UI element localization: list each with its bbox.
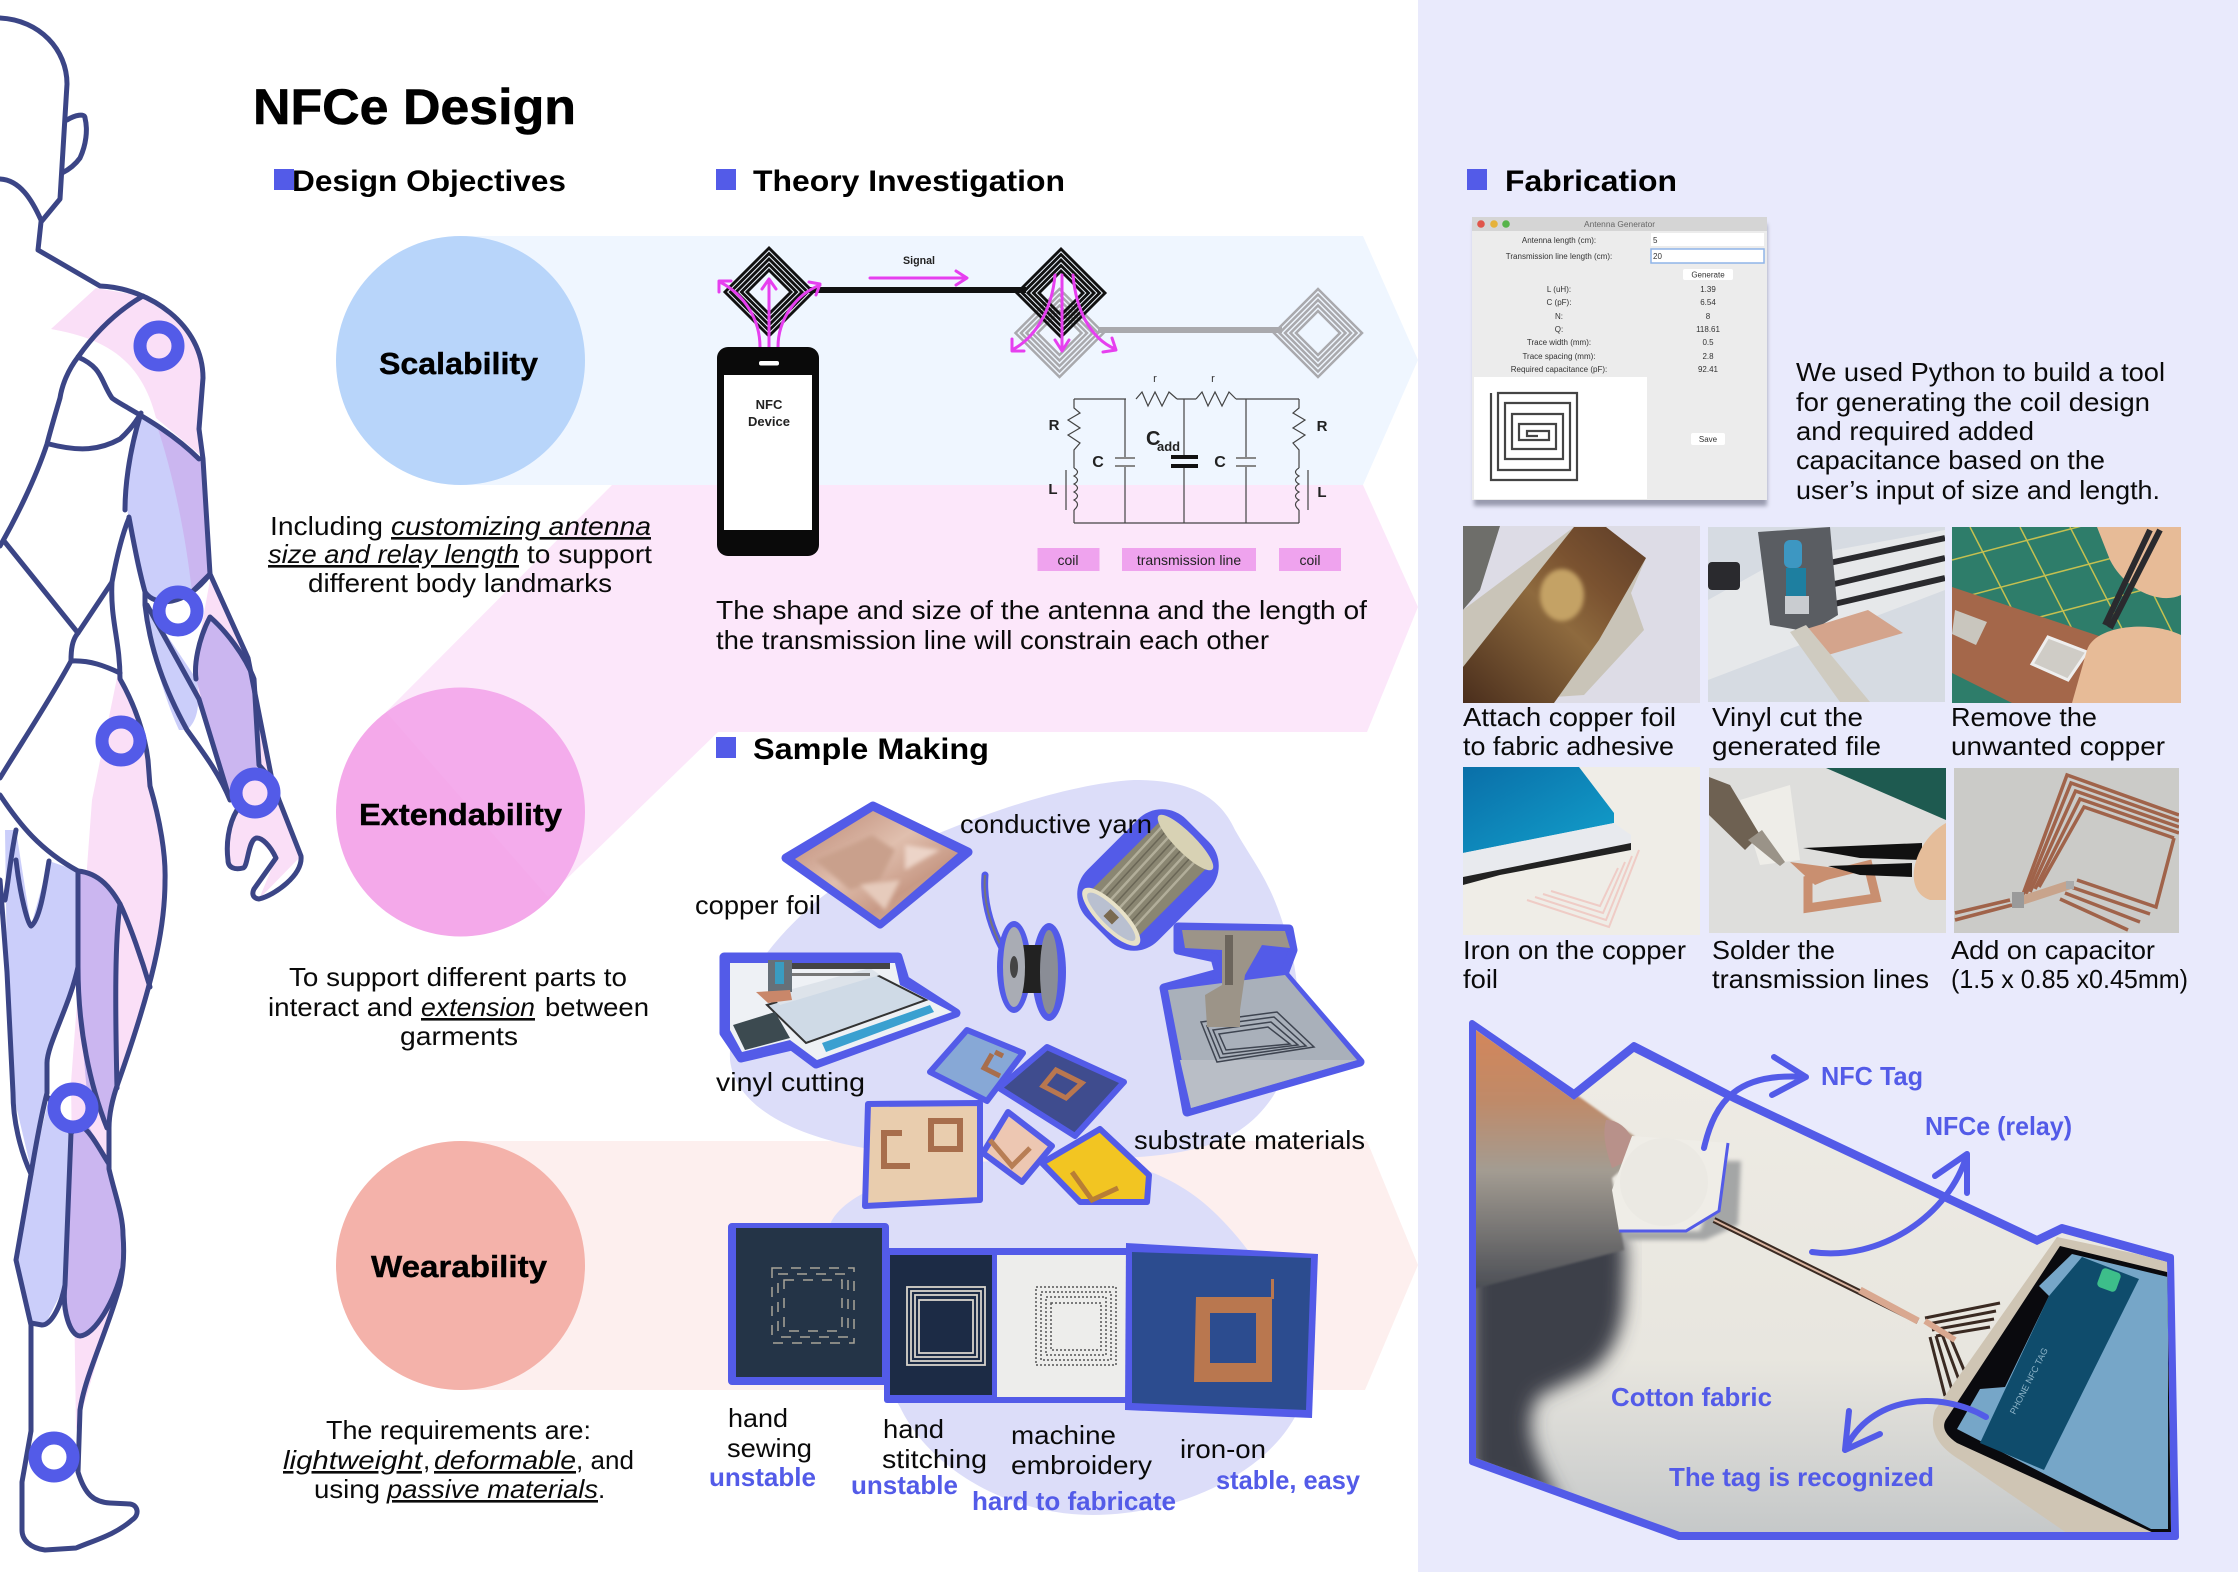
captions: first row steps: Remove the xyxy=(1951,702,2097,732)
labels: sewing methods: unstable xyxy=(709,1462,816,1492)
objective: scalability circle: Scalability xyxy=(379,346,539,381)
text: extendability description: between xyxy=(545,992,649,1022)
captions: first row steps: to fabric adhesive xyxy=(1463,731,1674,761)
captions: first row steps: Vinyl cut the xyxy=(1712,702,1863,732)
diagram: equivalent circuit: R xyxy=(1317,418,1328,435)
screenshot: antenna generator window: 5 xyxy=(1653,236,1658,245)
text: extendability description: To support different parts to xyxy=(289,962,627,992)
objective: scalability circle xyxy=(336,236,585,485)
labels: sewing methods xyxy=(709,1403,1361,1516)
photo: remove unwanted copper xyxy=(1952,527,2181,703)
labels: sewing methods: iron-on xyxy=(1180,1434,1266,1464)
text: wearability description: , and xyxy=(576,1445,634,1475)
diagram: equivalent circuit: add xyxy=(1157,439,1180,454)
text: scalability description: Including xyxy=(270,511,383,541)
heading: design objectives: Design Objectives xyxy=(292,165,566,198)
captions: first row steps: generated file xyxy=(1712,731,1881,761)
photos: substrate fabric patches xyxy=(865,1030,1149,1206)
text: extendability description xyxy=(268,962,649,1051)
screenshot: antenna generator window: Antenna Generator xyxy=(1584,220,1655,229)
title: NFCe Design xyxy=(253,79,576,135)
labels: sewing methods: hand xyxy=(728,1403,788,1433)
text: extendability description: extension xyxy=(421,992,535,1022)
captions: second row steps: (1.5 x 0.85 x0.45mm) xyxy=(1951,964,2188,994)
diagram: coils and signal xyxy=(719,248,1362,377)
labels: sewing methods: hard to fabricate xyxy=(972,1486,1176,1516)
text: tool description: capacitance based on the xyxy=(1796,445,2105,475)
diagram: equivalent circuit: C xyxy=(1146,428,1160,450)
labels: sewing methods: sewing xyxy=(727,1433,812,1463)
text: extendability description: garments xyxy=(400,1021,518,1051)
photo: hand stitching and machine embroidery swatches xyxy=(884,1248,1134,1403)
text: tool description: and required added xyxy=(1796,416,2034,446)
photo: conductive yarn spool xyxy=(1063,795,1233,965)
label: vinyl cutting: vinyl cutting xyxy=(716,1067,865,1097)
labels: sewing methods: unstable xyxy=(851,1470,958,1500)
text: wearability description: lightweight xyxy=(283,1445,424,1475)
diagram: equivalent circuit: r xyxy=(1211,373,1215,385)
diagram: equivalent circuit: C xyxy=(1214,454,1226,471)
shape: sample making blob upper xyxy=(730,780,1298,1159)
text: scalability description: different body landmarks xyxy=(308,568,612,598)
screenshot: antenna generator window: 92.41 xyxy=(1698,365,1719,374)
label: conductive yarn: conductive yarn xyxy=(960,809,1152,839)
objective: wearability circle xyxy=(336,1141,585,1390)
heading: sample making: Sample Making xyxy=(753,733,989,766)
labels: sewing methods: stable, easy xyxy=(1216,1465,1361,1495)
screenshot: antenna generator window: Required capacitance (pF): xyxy=(1511,365,1607,374)
text: theory description xyxy=(716,595,1368,655)
circle: extendability base xyxy=(336,688,585,936)
screenshot: antenna generator window: L (uH): xyxy=(1547,285,1571,294)
objective: wearability circle: Wearability xyxy=(371,1249,548,1284)
text: wearability description xyxy=(283,1415,634,1504)
screenshot: antenna generator window: Trace spacing (mm): xyxy=(1522,352,1596,361)
icon: NFC phone: NFC xyxy=(756,397,783,412)
text: wearability description: passive materials xyxy=(386,1474,598,1504)
arrow: tag recognized xyxy=(1845,1401,1986,1450)
photo: iron-on swatch xyxy=(1125,1243,1318,1418)
legend tags: coil, transmission line, coil: coil xyxy=(1299,552,1321,568)
photo: copper foil xyxy=(786,806,968,924)
screenshot: antenna generator window: 118.61 xyxy=(1696,325,1720,334)
text: scalability description xyxy=(268,511,653,598)
photo: final NFCe demo on cotton: PHONE NFC TAG xyxy=(2008,1346,2050,1416)
screenshot: antenna generator window: 0.5 xyxy=(1702,338,1714,347)
band: scalability chevron xyxy=(460,236,1418,485)
photo: solder transmission lines xyxy=(1709,768,1946,933)
text: scalability description: customizing antenna xyxy=(391,511,651,541)
text: tool description: for generating the coil design xyxy=(1796,387,2150,417)
text: tool description xyxy=(1796,357,2165,505)
text: wearability description: The requirements are: xyxy=(326,1415,591,1445)
photo: attach copper foil xyxy=(1463,526,1700,703)
captions: second row steps: transmission lines xyxy=(1712,964,1929,994)
label: substrate materials: substrate materials xyxy=(1134,1125,1365,1155)
text: wearability description: deformable xyxy=(434,1445,576,1475)
screenshot: antenna generator window: C (pF): xyxy=(1547,298,1571,307)
photo: vinyl cutter xyxy=(724,957,956,1064)
objective: extendability label: Extendability xyxy=(359,797,563,832)
band: extendability chevron xyxy=(386,485,1418,897)
screenshot: antenna generator window: 20 xyxy=(1653,252,1662,261)
band: wearability chevron xyxy=(460,1141,1418,1390)
photo: vinyl cut the file xyxy=(1708,527,1945,702)
text: scalability description: size and relay length xyxy=(268,539,519,569)
diagram: equivalent circuit: C xyxy=(1092,454,1104,471)
screenshot: antenna generator window: 2.8 xyxy=(1702,352,1714,361)
panel: fabrication background xyxy=(1418,0,2238,1572)
label: copper foil: copper foil xyxy=(695,890,821,920)
diagram: equivalent circuit: R xyxy=(1049,417,1060,434)
captions: first row steps xyxy=(1463,702,2165,761)
figure: human body with sensor landmarks xyxy=(0,18,301,1550)
heading: fabrication: Fabrication xyxy=(1505,165,1677,198)
screenshot: antenna generator window: 1.39 xyxy=(1700,285,1716,294)
captions: second row steps: Add on capacitor xyxy=(1951,935,2155,965)
text: scalability description: to support xyxy=(527,539,653,569)
label: tag recognized: The tag is recognized xyxy=(1669,1462,1934,1492)
legend tags: coil, transmission line, coil: coil xyxy=(1057,552,1079,568)
screenshot: antenna generator window: Save xyxy=(1699,435,1718,444)
labels: sewing methods: machine xyxy=(1011,1420,1116,1450)
text: tool description: user’s input of size and length. xyxy=(1796,475,2160,505)
screenshot: antenna generator window: Q: xyxy=(1555,325,1563,334)
arrow: to relay label xyxy=(1812,1154,1967,1253)
captions: second row steps: Solder the xyxy=(1712,935,1835,965)
icon: NFC phone xyxy=(717,347,819,556)
text: theory description: The shape and size of the antenna and the length of xyxy=(716,595,1368,625)
shape: sample making blob lower xyxy=(829,1157,1298,1515)
screenshot: antenna generator window: N: xyxy=(1555,312,1563,321)
label: NFC tag: NFC Tag xyxy=(1821,1061,1923,1091)
photo: capacitor on coil xyxy=(1954,768,2179,933)
diagram: equivalent circuit: L xyxy=(1317,484,1327,501)
diagram: coils and signal: Signal xyxy=(903,255,935,267)
photo: iron on foil xyxy=(1463,767,1700,935)
text: wearability description: using xyxy=(314,1474,380,1504)
captions: second row steps: Iron on the copper xyxy=(1463,935,1686,965)
label: NFCe relay: NFCe (relay) xyxy=(1925,1111,2072,1141)
text: wearability description: , xyxy=(423,1445,430,1475)
photo: final NFCe demo on cotton xyxy=(1470,1020,2180,1540)
labels: sewing methods: hand xyxy=(883,1414,944,1444)
screenshot: antenna generator window: Antenna length (cm): xyxy=(1522,236,1596,245)
diagram: equivalent circuit xyxy=(1048,373,1328,523)
text: extendability description: interact and xyxy=(268,992,413,1022)
captions: second row steps xyxy=(1463,935,2188,994)
photo: embroidery machine xyxy=(1164,927,1360,1112)
labels: sewing methods: stitching xyxy=(882,1444,987,1474)
label: cotton fabric: Cotton fabric xyxy=(1611,1382,1772,1412)
captions: first row steps: unwanted copper xyxy=(1951,731,2165,761)
labels: sewing methods: embroidery xyxy=(1011,1450,1152,1480)
text: wearability description: . xyxy=(598,1474,605,1504)
photo: hand sewing swatch xyxy=(732,1227,885,1381)
diagram: equivalent circuit: L xyxy=(1048,481,1058,498)
arrow: to NFC tag xyxy=(1704,1057,1806,1148)
heading: theory investigation: Theory Investigation xyxy=(753,165,1065,198)
screenshot: antenna generator window: 8 xyxy=(1706,312,1711,321)
screenshot: antenna generator window: Generate xyxy=(1691,270,1725,280)
icon: NFC phone: Device xyxy=(748,414,790,429)
legend tags: coil, transmission line, coil: transmission line xyxy=(1137,552,1241,568)
captions: second row steps: foil xyxy=(1463,964,1498,994)
text: theory description: the transmission line will constrain each other xyxy=(716,625,1269,655)
legend tags: coil, transmission line, coil xyxy=(1038,548,1341,571)
captions: first row steps: Attach copper foil xyxy=(1463,702,1676,732)
screenshot: antenna generator window xyxy=(1472,217,1767,506)
diagram: equivalent circuit: r xyxy=(1153,373,1157,385)
photo: small black yarn spool xyxy=(985,875,1066,1021)
screenshot: antenna generator window: Transmission line length (cm): xyxy=(1506,252,1612,261)
screenshot: antenna generator window: 6.54 xyxy=(1700,298,1716,307)
text: tool description: We used Python to build a tool xyxy=(1796,357,2165,387)
screenshot: antenna generator window: Trace width (mm): xyxy=(1527,338,1591,347)
